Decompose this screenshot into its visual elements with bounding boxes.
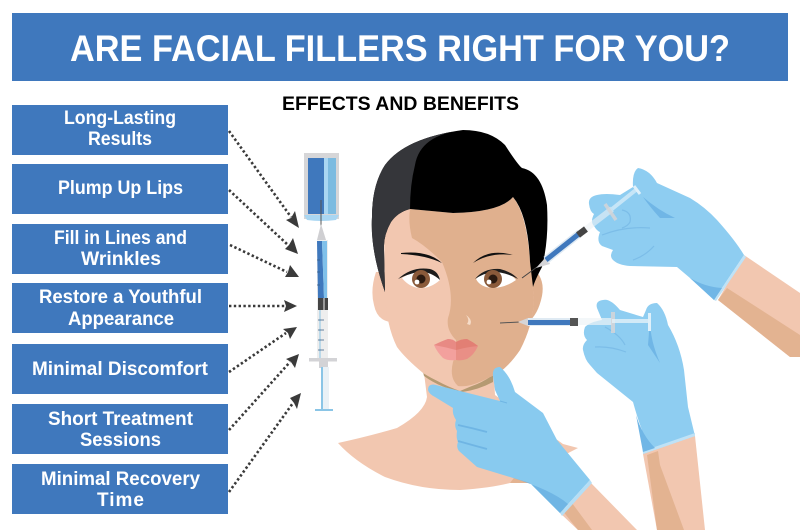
face dark side <box>409 197 534 386</box>
illustration: gloved hand at chin <box>428 367 637 530</box>
face light side <box>384 197 534 388</box>
benefit: short treatment sessions: Sessions <box>80 430 161 451</box>
benefit: long-lasting results: Long-Lasting <box>64 108 176 129</box>
dotted arrows <box>229 131 301 492</box>
benefit: fill in lines and wrinkles: Wrinkles <box>81 249 161 270</box>
title banner: ARE FACIAL FILLERS RIGHT FOR YOU? <box>70 28 730 69</box>
hair <box>372 130 547 292</box>
benefit: fill in lines and wrinkles <box>12 224 228 274</box>
glove <box>428 367 590 513</box>
panel: benefit list <box>12 105 228 514</box>
benefit: plump up lips <box>12 164 228 214</box>
benefit: minimal recovery time <box>12 464 228 514</box>
left eye <box>398 268 440 288</box>
illustration: upper right arm and hand with syringe <box>522 168 800 357</box>
glove <box>589 168 744 300</box>
syringe <box>522 267 537 278</box>
icon: vertical syringe <box>304 153 339 411</box>
heading: effects and benefits: EFFECTS AND BENEFITS <box>282 94 519 115</box>
benefit: fill in lines and wrinkles: Fill in Lines and <box>54 228 187 249</box>
ears <box>372 272 392 322</box>
right eyebrow <box>473 253 513 263</box>
illustration: woman's face <box>338 130 578 490</box>
benefit: minimal discomfort: Minimal Discomfort <box>32 359 209 380</box>
illustration: lower right arm and hand with syringe <box>500 300 705 530</box>
glove <box>583 300 695 454</box>
forearm <box>560 482 637 530</box>
benefit: restore a youthful appearance <box>12 283 228 333</box>
benefit: plump up lips: Plump Up Lips <box>58 178 183 199</box>
left eyebrow <box>401 252 442 263</box>
benefit: minimal recovery time: Minimal Recovery <box>41 469 200 490</box>
benefit: restore a youthful appearance: Restore a Youthful <box>39 287 202 308</box>
right eye <box>475 269 518 288</box>
nose highlight <box>466 315 471 325</box>
benefit: long-lasting results <box>12 105 228 155</box>
title banner <box>12 13 788 81</box>
syringe <box>500 322 520 323</box>
benefit: short treatment sessions: Short Treatment <box>48 409 194 430</box>
benefit: short treatment sessions <box>12 404 228 454</box>
shoulders and neck <box>338 365 578 490</box>
shoulder shadow <box>510 470 535 483</box>
benefit: minimal discomfort <box>12 344 228 394</box>
benefit: restore a youthful appearance: Appearance <box>68 309 174 330</box>
forearm <box>718 255 800 357</box>
forearm <box>643 436 705 530</box>
benefit: minimal recovery time: Time <box>97 490 144 511</box>
benefit: long-lasting results: Results <box>88 129 152 150</box>
lips <box>434 339 478 360</box>
